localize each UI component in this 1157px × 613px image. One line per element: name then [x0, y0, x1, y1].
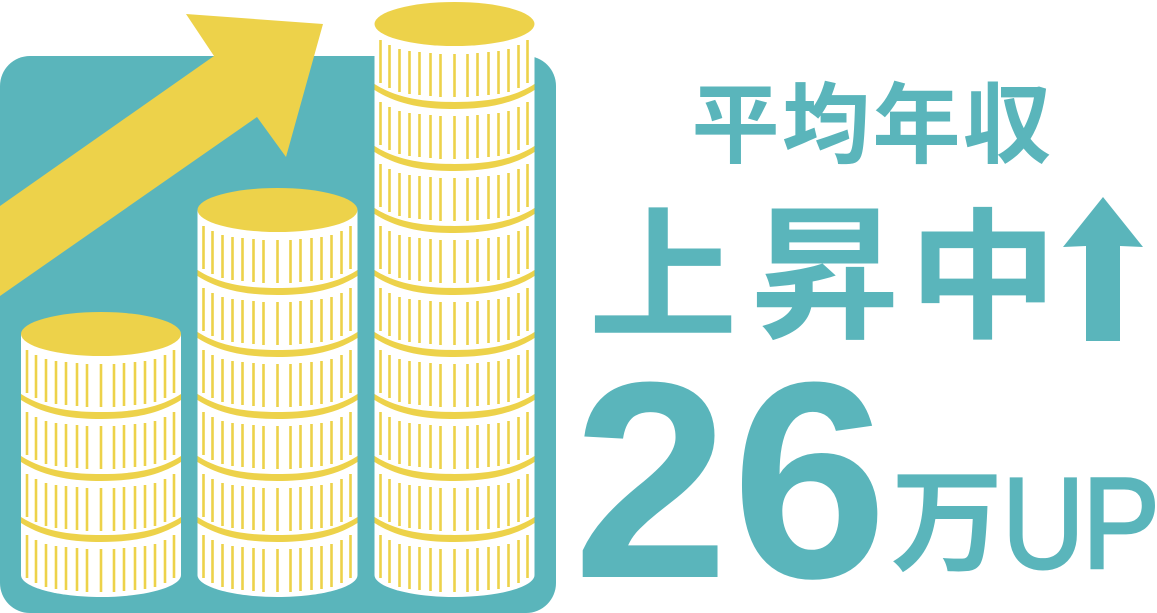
- coin stack: tall: [374, 2, 534, 597]
- icon: up arrow: [1063, 197, 1143, 341]
- label: UP: [1002, 450, 1157, 596]
- arrow: rising yellow trend arrow: [0, 14, 323, 296]
- coin stack: medium: [198, 188, 358, 597]
- teal background panel: [0, 56, 556, 613]
- heading: 上昇中: 昇: [751, 196, 899, 359]
- heading: 上昇中: 中: [909, 199, 1057, 357]
- label: UP: U: [1002, 450, 1085, 596]
- unit: 万: 万: [891, 461, 1003, 586]
- coin stack: short: [21, 312, 181, 597]
- heading: 上昇中: 上: [589, 198, 737, 357]
- heading: 平均年収: 平均年収: [691, 76, 1054, 175]
- heading: 上昇中: [589, 196, 1057, 359]
